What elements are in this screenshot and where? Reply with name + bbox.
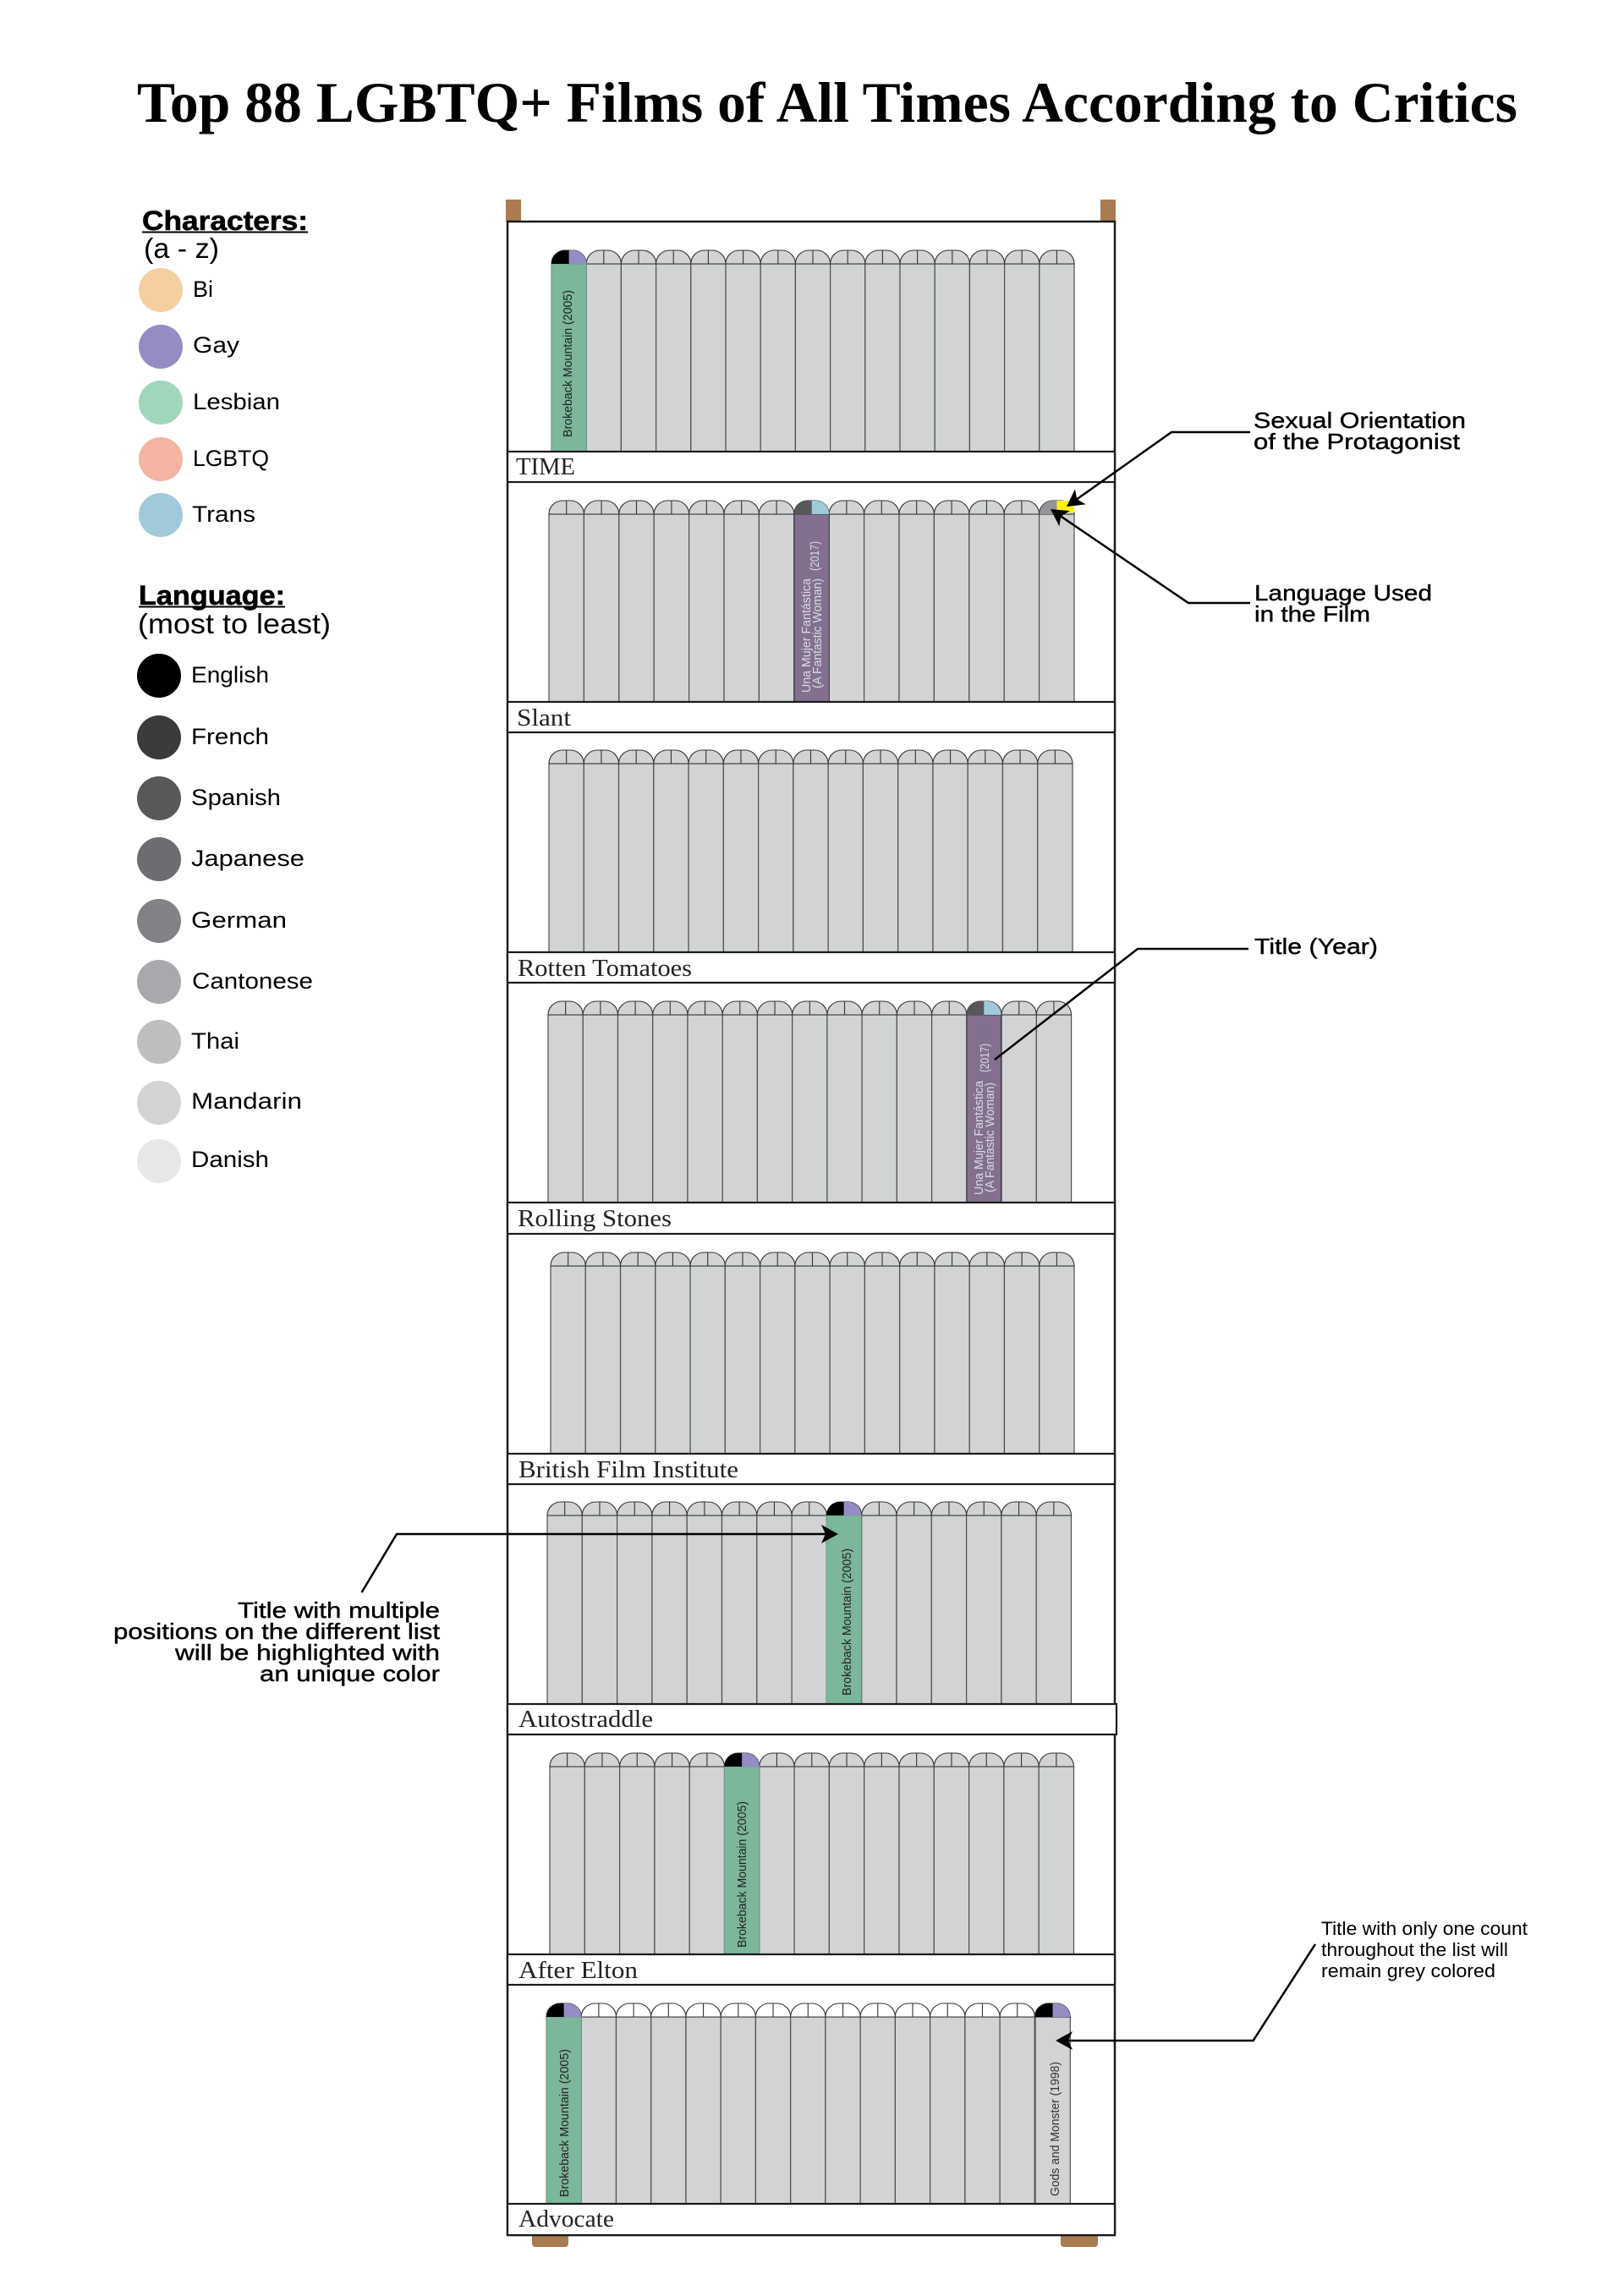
legend item: Danish — [137, 1139, 269, 1183]
shelf frame — [508, 222, 1115, 2235]
callout text: language used — [1254, 580, 1432, 627]
legend item: Spanish: Spanish — [191, 785, 281, 810]
title: Top 88 LGBTQ+ Films of All Times According to Critics — [137, 70, 1517, 134]
legend item: English — [137, 654, 269, 698]
band: Slant: Slant — [517, 705, 571, 732]
legend item: LGBTQ — [139, 437, 269, 481]
callout: multiple positions — [113, 1525, 838, 1686]
bookshelf — [506, 200, 1116, 2247]
callout text: single count — [1321, 1918, 1528, 1981]
callout text: multiple positions: an unique color — [260, 1661, 440, 1686]
legend item: Gay: Gay — [193, 332, 240, 358]
book: Brokeback Mountain in Autostraddle: Brokeback Mountain (2005) — [840, 1548, 854, 1696]
band: Autostraddle — [508, 1704, 1116, 1734]
legend item: Lesbian — [139, 381, 280, 425]
shelf row: TIME — [508, 250, 1115, 482]
callout text: single count: remain grey colored — [1321, 1960, 1495, 1981]
book: Una Mujer Fantastica in Slant: (2017) — [808, 541, 822, 571]
legend item: Gay — [139, 325, 240, 369]
legend subheading: a to z: (a - z) — [144, 233, 219, 264]
callout: language used — [1045, 501, 1432, 627]
legend item: Cantonese: Cantonese — [192, 968, 313, 994]
callout text: sexual orientation: Sexual Orientation — [1254, 408, 1466, 433]
band: Autostraddle: Autostraddle — [518, 1707, 653, 1733]
legend item: German — [137, 899, 287, 943]
book: Brokeback Mountain in After Elton — [724, 1753, 760, 1955]
legend subheading: most to least: (most to least) — [138, 608, 331, 639]
shelf row: British Film Institute — [508, 1252, 1115, 1484]
callout text: multiple positions: Title with multiple — [238, 1597, 440, 1623]
shelf row: Rotten Tomatoes — [508, 750, 1115, 983]
legend item: Spanish — [137, 776, 281, 820]
band: After Elton — [508, 1954, 1115, 1985]
callout text: multiple positions: will be highlighted with — [174, 1640, 440, 1665]
legend item: French — [137, 715, 269, 759]
band: Rolling Stones: Rolling Stones — [518, 1206, 672, 1232]
legend item: LGBTQ: LGBTQ — [193, 446, 269, 471]
shelf row: Autostraddle — [508, 1502, 1116, 1734]
band: TIME — [508, 452, 1115, 482]
callout: sexual orientation — [1062, 408, 1466, 514]
book: Gods and Monster in Advocate — [1035, 2003, 1070, 2206]
legend item: Trans: Trans — [192, 501, 255, 527]
callout text: title and year: Title (Year) — [1254, 934, 1378, 959]
book: Brokeback Mountain in Autostraddle — [826, 1502, 861, 1704]
callout text: language used: in the Film — [1254, 601, 1370, 627]
shelf row: Slant — [508, 501, 1115, 732]
book: Una Mujer Fantastica in Slant: (A Fantastic Woman) — [810, 578, 825, 688]
legend item: Lesbian: Lesbian — [193, 389, 280, 414]
arrow: sexual orientation leader — [1062, 432, 1250, 514]
band: Rotten Tomatoes — [508, 952, 1115, 983]
shelf feet — [532, 2235, 1098, 2247]
band: Advocate — [508, 2204, 1115, 2235]
leader line: title — [995, 949, 1248, 1060]
callout text: multiple positions: positions on the different list — [113, 1619, 441, 1644]
book: Brokeback Mountain in TIME — [551, 250, 586, 452]
book: Gods and Monster in Advocate: Gods and Monster (1998) — [1048, 2062, 1062, 2196]
shelf row: Advocate — [508, 2003, 1115, 2235]
band: Slant — [508, 702, 1115, 732]
shelf row: After Elton — [508, 1753, 1115, 1985]
legend item: Mandarin: Mandarin — [191, 1088, 302, 1114]
legend item: Bi — [139, 268, 213, 312]
legend item: Trans — [139, 493, 255, 537]
arrow: single count leader — [1056, 1944, 1315, 2050]
book: Una Mujer Fantastica in Slant — [794, 501, 829, 703]
book: Una Mujer Fantastica in Rolling Stones: (2017) — [978, 1044, 992, 1072]
shelf row: Rolling Stones — [508, 1001, 1115, 1234]
legend item: Japanese — [137, 837, 304, 881]
book: Una Mujer Fantastica in Rolling Stones — [967, 1001, 1001, 1203]
legend item: English: English — [191, 662, 269, 688]
legend item: Thai: Thai — [191, 1028, 239, 1054]
legend item: Thai — [137, 1020, 239, 1064]
book: Una Mujer Fantastica in Rolling Stones: Una Mujer Fantástica — [972, 1080, 986, 1195]
callout text: multiple positions — [113, 1597, 441, 1686]
legend: language — [137, 580, 331, 1183]
legend item: French: French — [191, 724, 269, 749]
callout: single count — [1056, 1918, 1528, 2050]
band: Advocate: Advocate — [518, 2206, 614, 2233]
callout text: language used: Language Used — [1254, 580, 1432, 606]
band: Rolling Stones — [508, 1203, 1115, 1234]
band: British Film Institute — [508, 1454, 1115, 1484]
legend item: Mandarin — [137, 1081, 302, 1125]
book: Brokeback Mountain in After Elton: Brokeback Mountain (2005) — [735, 1801, 749, 1948]
book: Brokeback Mountain in Advocate — [546, 2003, 581, 2206]
book: Brokeback Mountain in Advocate: Brokeback Mountain (2005) — [557, 2049, 572, 2197]
legend item: Japanese: Japanese — [191, 846, 304, 871]
callout text: sexual orientation — [1254, 408, 1466, 454]
legend heading: characters: Characters: — [142, 205, 308, 236]
book: Una Mujer Fantastica in Slant: Una Mujer Fantástica — [799, 578, 814, 693]
band: TIME: TIME — [516, 454, 575, 480]
legend item: Bi: Bi — [193, 277, 213, 302]
shelf hanger posts — [506, 200, 1116, 222]
arrow: language leader — [1045, 501, 1250, 603]
callout: title and year — [995, 934, 1378, 1060]
legend item: Danish: Danish — [191, 1147, 269, 1172]
book: Una Mujer Fantastica in Rolling Stones: (A Fantastic Woman) — [983, 1082, 997, 1192]
callout text: sexual orientation: of the Protagonist — [1254, 429, 1461, 454]
legend: characters — [139, 205, 308, 537]
band: British Film Institute: British Film Institute — [518, 1457, 738, 1483]
legend item: Cantonese — [137, 960, 313, 1004]
callout text: single count: throughout the list will — [1321, 1939, 1508, 1960]
book: Brokeback Mountain in TIME: Brokeback Mountain (2005) — [561, 290, 575, 437]
legend heading: language: Language: — [139, 580, 285, 611]
band: Rotten Tomatoes: Rotten Tomatoes — [518, 956, 692, 982]
book cap: language and orientation key sample — [1040, 501, 1074, 514]
legend item: German: German — [191, 907, 287, 933]
band: After Elton: After Elton — [518, 1958, 638, 1984]
arrow: multiple positions leader — [362, 1525, 838, 1592]
callout text: single count: Title with only one count — [1321, 1918, 1528, 1939]
